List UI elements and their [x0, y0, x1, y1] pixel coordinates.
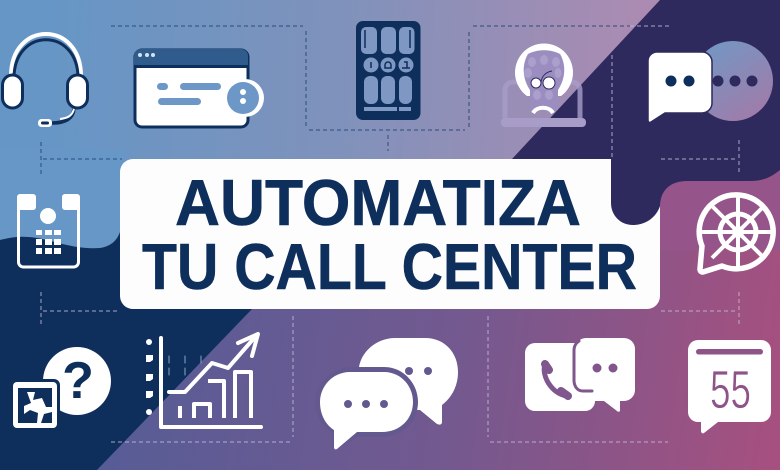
background: blue left strip: [0, 150, 125, 260]
icon: phone and message: [525, 338, 635, 412]
background: dark indigo shape upper-right: [512, 0, 780, 225]
icon: growth chart: [146, 334, 261, 427]
background: navy wave lower-left: [0, 232, 252, 470]
icon: web chat bubble: [699, 195, 775, 272]
icon: office phone calendar: [17, 194, 80, 267]
title: AUTOMATIZA: [175, 166, 581, 239]
icon: puzzle and question mark: ?: [62, 352, 94, 410]
icon: calendar bubble 55: [688, 340, 771, 433]
title: [142, 166, 637, 303]
dashed connector lines: [41, 26, 739, 442]
background: pink right panel: [640, 170, 780, 250]
background: lower gradient: [0, 235, 780, 470]
icon: support avatar on laptop: [501, 44, 586, 127]
icon: calendar bubble 55: 55: [710, 360, 751, 420]
icon: conversation bubbles: [315, 338, 458, 449]
icon: puzzle and question mark: [10, 347, 111, 431]
title panel: [120, 159, 660, 309]
icon: browser window with chat: [134, 49, 264, 127]
background: upper gradient: [0, 0, 780, 240]
icon: keypad: [356, 21, 420, 120]
icon: two chat bubbles: [648, 41, 773, 122]
title: TU CALL CENTER: [142, 230, 637, 303]
icon: headset: [2, 34, 88, 127]
